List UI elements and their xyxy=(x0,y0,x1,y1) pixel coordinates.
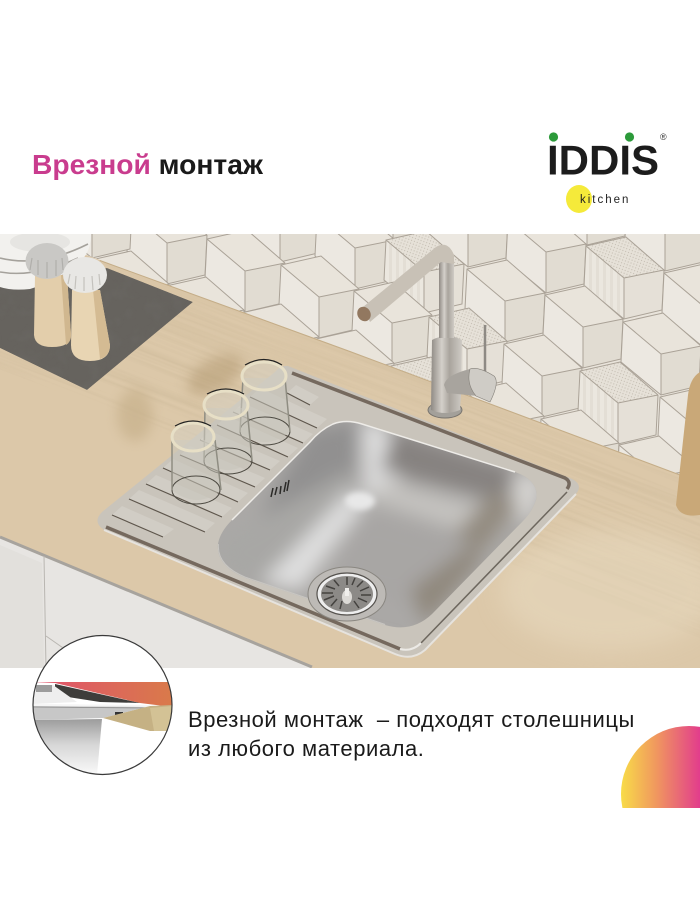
detail circle: cutaway of mounting xyxy=(32,635,172,775)
drainboard ridges xyxy=(112,385,327,537)
fixing slot xyxy=(115,712,123,715)
faucet base xyxy=(428,405,462,418)
faucet xyxy=(355,245,496,418)
countertop top surface xyxy=(33,682,172,707)
faucet spout xyxy=(363,245,454,322)
sink rim shadow band xyxy=(55,684,140,703)
slate board xyxy=(0,268,193,390)
description text: из любого материала. xyxy=(188,736,424,761)
chipboard edge xyxy=(103,705,172,731)
faucet neck xyxy=(439,262,454,338)
logo registered mark: ® xyxy=(660,132,667,142)
decorative gradient circle xyxy=(621,726,700,808)
faucet handle xyxy=(444,369,478,396)
sink xyxy=(97,360,579,657)
faucet spout end xyxy=(357,306,371,322)
sink outer flange xyxy=(97,366,579,657)
shaker left xyxy=(26,243,71,347)
logo wordmark: IDDIS xyxy=(547,136,659,184)
sink surface xyxy=(33,685,77,704)
faucet body xyxy=(431,336,462,413)
title: Врезной монтаж xyxy=(32,148,264,180)
sink rim shadow xyxy=(292,373,569,489)
cutting board xyxy=(676,372,700,516)
logo green dots xyxy=(549,132,634,142)
logo yellow blob xyxy=(566,185,592,213)
faucet lever xyxy=(484,325,486,378)
drain strainer xyxy=(308,567,386,621)
logo kitchen label: kitchen xyxy=(580,194,630,206)
overflow slots xyxy=(271,480,289,497)
kitchen photo xyxy=(0,234,700,668)
salt shakers xyxy=(26,243,110,361)
back edge shadow xyxy=(100,260,700,482)
glass back xyxy=(240,360,290,445)
tile backsplash xyxy=(86,234,700,474)
shaker right xyxy=(63,257,110,361)
sink bowl xyxy=(218,422,536,628)
bowl wall xyxy=(33,719,102,775)
sink flange xyxy=(33,706,150,720)
white bowls xyxy=(0,232,91,290)
glasses xyxy=(172,360,290,504)
wood countertop xyxy=(0,255,700,668)
glass middle xyxy=(204,389,252,474)
description text: Врезной монтаж – подходят столешницы xyxy=(188,707,635,732)
cabinet fronts xyxy=(0,537,312,668)
logo: IDDIS kitchen xyxy=(547,132,667,213)
glass front xyxy=(172,421,221,504)
